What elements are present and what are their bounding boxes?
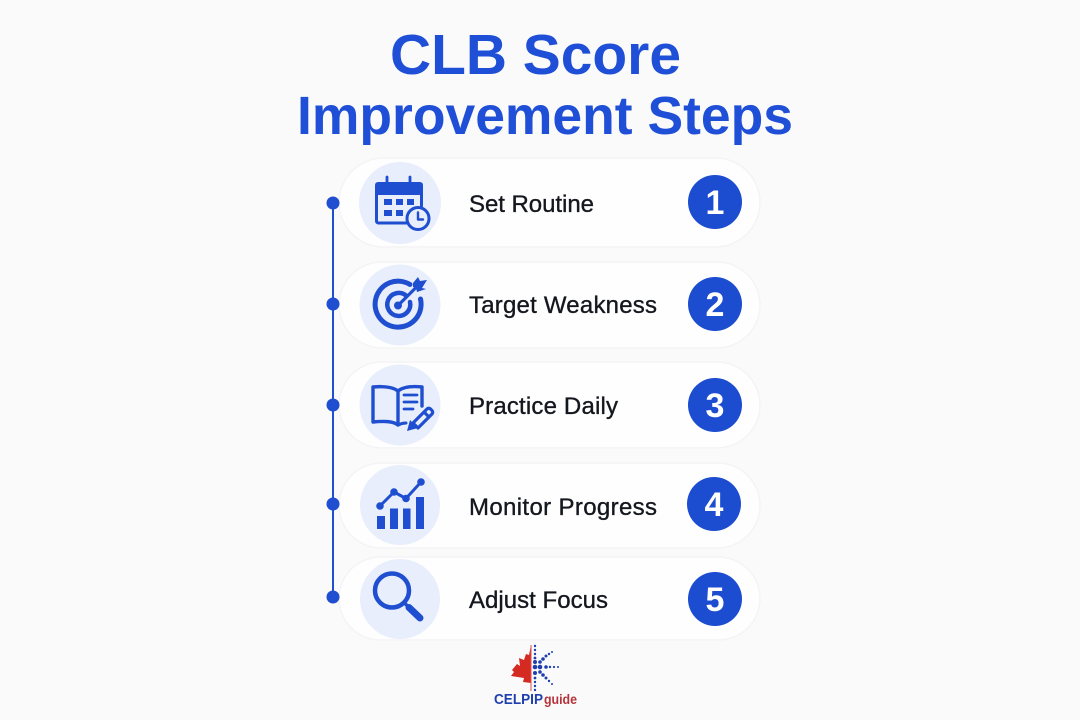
number badge: 1 — [706, 184, 724, 222]
label: Practice Daily — [469, 393, 618, 420]
panel: step 3 — [339, 362, 760, 448]
number badge — [688, 378, 742, 432]
number badge: 2 — [706, 286, 724, 324]
number badge — [688, 175, 742, 229]
label: Set Routine — [469, 191, 594, 218]
title: CLB Score — [390, 23, 681, 87]
icon: magnifying glass — [375, 574, 420, 618]
wordmark — [494, 692, 577, 708]
number badge — [687, 477, 741, 531]
panel: step 1 — [339, 158, 760, 247]
label: Adjust Focus — [469, 587, 608, 614]
icon: dotted rays — [533, 645, 559, 691]
title: Improvement Steps — [297, 86, 793, 146]
title — [297, 23, 793, 146]
number badge: 3 — [706, 387, 724, 425]
number badge — [688, 572, 742, 626]
number badge — [688, 277, 742, 331]
label: Target Weakness — [469, 292, 657, 319]
number badge: 4 — [705, 486, 724, 524]
icon: maple leaf half — [511, 645, 531, 683]
icon: target with arrow — [375, 277, 427, 327]
wordmark: guide — [544, 692, 577, 707]
icon: calendar with clock — [375, 177, 429, 230]
panel: step 2 — [339, 262, 760, 348]
timeline — [326, 196, 340, 604]
panel: step 4 — [339, 463, 760, 548]
icon: open book with pencil — [373, 387, 433, 431]
icon: rising bar chart — [376, 478, 425, 529]
number badge: 5 — [706, 581, 724, 619]
panel: step 5 — [339, 557, 760, 640]
wordmark: CELPIP — [494, 692, 543, 708]
label: Monitor Progress — [469, 494, 657, 521]
logo: CELPIPguide — [494, 645, 577, 708]
